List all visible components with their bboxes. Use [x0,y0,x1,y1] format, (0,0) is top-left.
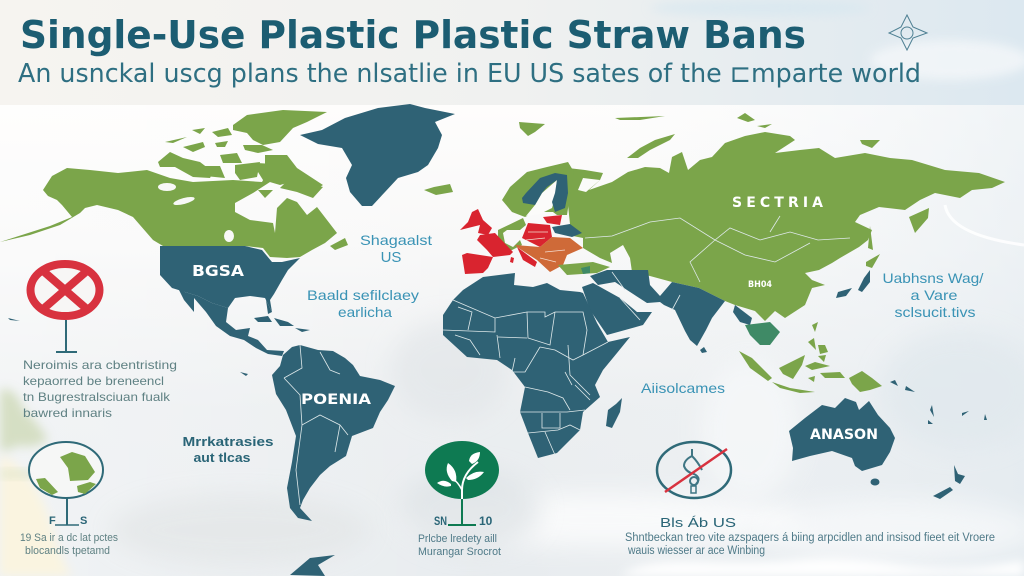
label: Bgsa: BGSA [192,262,244,280]
label: SN 10 [434,514,493,528]
South America [272,345,395,521]
icon: compass star [889,15,927,50]
callout: Shagaalst US [360,232,432,266]
label: Sectria: SECTRIA [732,195,824,211]
label: F S: S [80,515,87,527]
header band [0,0,1024,105]
subtitle: An usnckal uscg plans the nlsatlie in EU US sates of the ⊏mparte world [18,59,921,89]
lakes [158,183,234,242]
Middle East and India [582,270,780,353]
text block: left note: tn Bugrestralsciuan fualk [23,390,171,404]
callout: Baald sefilclaey: Baald sefilclaey [307,287,419,303]
label: F S [49,515,87,527]
Antarctic peninsula fragment [290,555,335,576]
Iceland [424,184,453,195]
callout: Baald sefilclaey [307,287,419,320]
callout: Aiisolcames: Aiisolcames [641,380,725,396]
callout: Shagaalst US: US [381,249,401,266]
text block: globe caption [20,532,118,557]
label: Bh04: BH04 [748,280,772,290]
text block: left note: kepaorred be breneencl [23,374,164,388]
text block: plant caption: Murangar Srocrot [418,546,501,558]
icon: banned straw [657,442,731,498]
Arctic islands [519,113,880,148]
callout: Uabhsns Wag: a Vare [910,287,958,303]
Mexico and Central America [178,288,284,356]
label: SN 10: 10 [479,514,493,528]
callout: Uabhsns Wag [882,270,984,320]
Madagascar [606,398,622,428]
South-East Asia islands [739,322,882,393]
United States [160,246,300,312]
text block: bottom note: wauis wiesser ar ace Winbing [627,545,765,557]
callout: Mrrkatrasies: Mrrkatrasies [182,434,274,449]
Tasmania [870,478,880,486]
Caribbean [240,300,310,376]
Africa [443,273,630,458]
icon: prohibition sign [30,264,100,352]
text block: globe caption: blocandls tpetamd [25,545,110,557]
label: F S: F [49,515,56,527]
title: Single-Use Plastic Plastic Straw Bans [20,13,806,57]
icon: plant in green circle [425,441,499,525]
callout: Mrrkatrasies [182,434,274,465]
Japan, Kamchatka and Sakhalin [836,208,929,298]
callout: Baald sefilclaey: earlicha [338,304,392,320]
North America: Canada and Alaska [0,110,348,258]
text block: bottom note [625,532,995,557]
Novaya Zemlya [627,134,675,158]
Europe: ban countries [460,209,610,275]
text block: left note: bawred innaris [23,406,112,420]
beach and foliage, bottom left [0,389,72,576]
callout: Uabhsns Wag: sclsucit.tivs [894,304,976,320]
text block: bottom note: Shntbeckan treo vite azspaqers á biing arpcidlen and insisod fieet eit Vroere [625,532,995,544]
icon: globe [29,442,103,525]
Pacific islands [8,318,987,424]
text block: left note [23,358,177,420]
text block: globe caption: 19 Sa ir a dc lat pctes [20,532,118,544]
text block: plant caption: Prlcbe lredety aill [418,533,497,545]
Greenland [300,104,455,206]
callout: Mrrkatrasies: aut tlcas [194,450,250,465]
callout: Uabhsns Wag: Uabhsns Wag/ [882,270,984,286]
label: Anason: ANASON [810,427,878,443]
Australia [789,398,895,471]
callout: Shagaalst US: Shagaalst [360,232,432,248]
label: Bls Ab US: Bls Áb US [660,515,736,530]
label: Poenia: POENIA [301,392,371,408]
text block: plant caption [418,533,501,558]
Scandinavia [502,162,574,217]
Eurasia [568,132,1005,321]
label: SN 10: SN [434,514,447,528]
text block: left note: Neroimis ara cbentristing [23,358,177,372]
New Zealand [933,465,965,499]
